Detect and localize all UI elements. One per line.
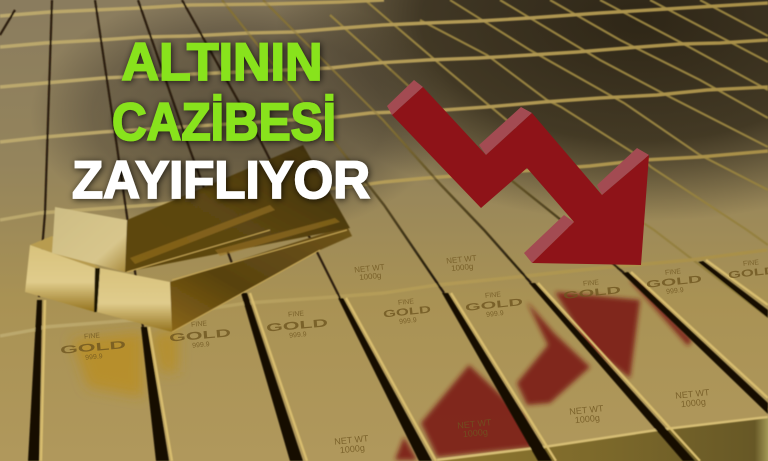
engraved labels on bars: FINE	[398, 298, 415, 307]
engraved labels on bars: NET WT	[457, 417, 492, 431]
engraved labels on bars: GOLD	[728, 266, 768, 281]
engraved labels on bars: 999.9	[192, 341, 210, 350]
engraved labels on bars: 1000g	[339, 443, 365, 455]
engraved labels on bars: FINE	[583, 279, 600, 288]
engraved labels on bars: 1000g	[451, 262, 474, 273]
title line 3: ZAYIFLIYOR	[72, 151, 370, 210]
engraved labels on bars	[59, 253, 768, 456]
engraved labels on bars: 999.9	[289, 331, 307, 340]
title line 2: CAZİBESİ	[112, 93, 336, 152]
reflection of stacked bars	[72, 330, 178, 397]
lower bar long side	[170, 226, 352, 332]
red reflection of arrow on bars	[395, 280, 692, 460]
engraved labels on bars: 999.9	[666, 287, 684, 296]
long seams in the right field	[222, 0, 768, 410]
engraved labels on bars: FINE	[84, 332, 101, 341]
engraved labels on bars: NET WT	[569, 403, 604, 417]
engraved labels on bars: GOLD	[563, 285, 621, 302]
stacked gold bars	[25, 145, 352, 332]
engraved labels on bars: 999.9	[85, 353, 103, 362]
engraved labels on bars: 999.9	[399, 317, 417, 326]
engraved labels on bars: 1000g	[462, 427, 488, 439]
engraved labels on bars: 1000g	[680, 397, 706, 409]
engraved labels on bars: NET WT	[446, 253, 477, 266]
engraved labels on bars: GOLD	[266, 317, 329, 335]
engraved labels on bars: FINE	[191, 320, 208, 329]
gap between lower bars	[94, 268, 100, 312]
lower middle bar end	[97, 268, 172, 332]
engraved labels on bars: NET WT	[675, 387, 710, 401]
engraved labels on bars: FINE	[665, 268, 682, 277]
engraved labels on bars: FINE	[743, 259, 760, 268]
engraved labels on bars: GOLD	[383, 305, 431, 320]
engraved labels on bars: 999.9	[486, 310, 504, 319]
bright bevels beside front gaps	[41, 260, 768, 461]
engraved labels on bars: GOLD	[646, 274, 702, 291]
engraved labels on bars: NET WT	[334, 433, 369, 447]
engraved labels on bars: GOLD	[169, 327, 232, 345]
arrow face	[392, 87, 649, 265]
upper bar long side	[125, 145, 350, 272]
engraved labels on bars: 1000g	[574, 413, 600, 425]
lower left bar end	[25, 245, 95, 312]
engraved labels on bars: GOLD	[60, 339, 127, 357]
red falling arrow	[387, 80, 649, 265]
engraved labels on bars: NET WT	[354, 262, 385, 275]
engraved labels on bars: FINE	[288, 310, 305, 319]
upper bar end	[52, 207, 127, 272]
engraved labels on bars: FINE	[485, 291, 502, 300]
lower left bar top sliver	[30, 236, 100, 268]
dark gaps in upper left field	[0, 0, 340, 327]
title line 1: ALTININ	[122, 33, 322, 92]
title	[72, 33, 370, 210]
bar side highlights	[130, 205, 340, 264]
dark gaps between front bars	[28, 261, 768, 461]
arrow lips	[387, 80, 649, 263]
bar edges	[127, 230, 347, 332]
engraved labels on bars: GOLD	[465, 297, 523, 314]
engraved labels on bars: 1000g	[359, 271, 382, 282]
end faces of front bars	[437, 417, 768, 461]
